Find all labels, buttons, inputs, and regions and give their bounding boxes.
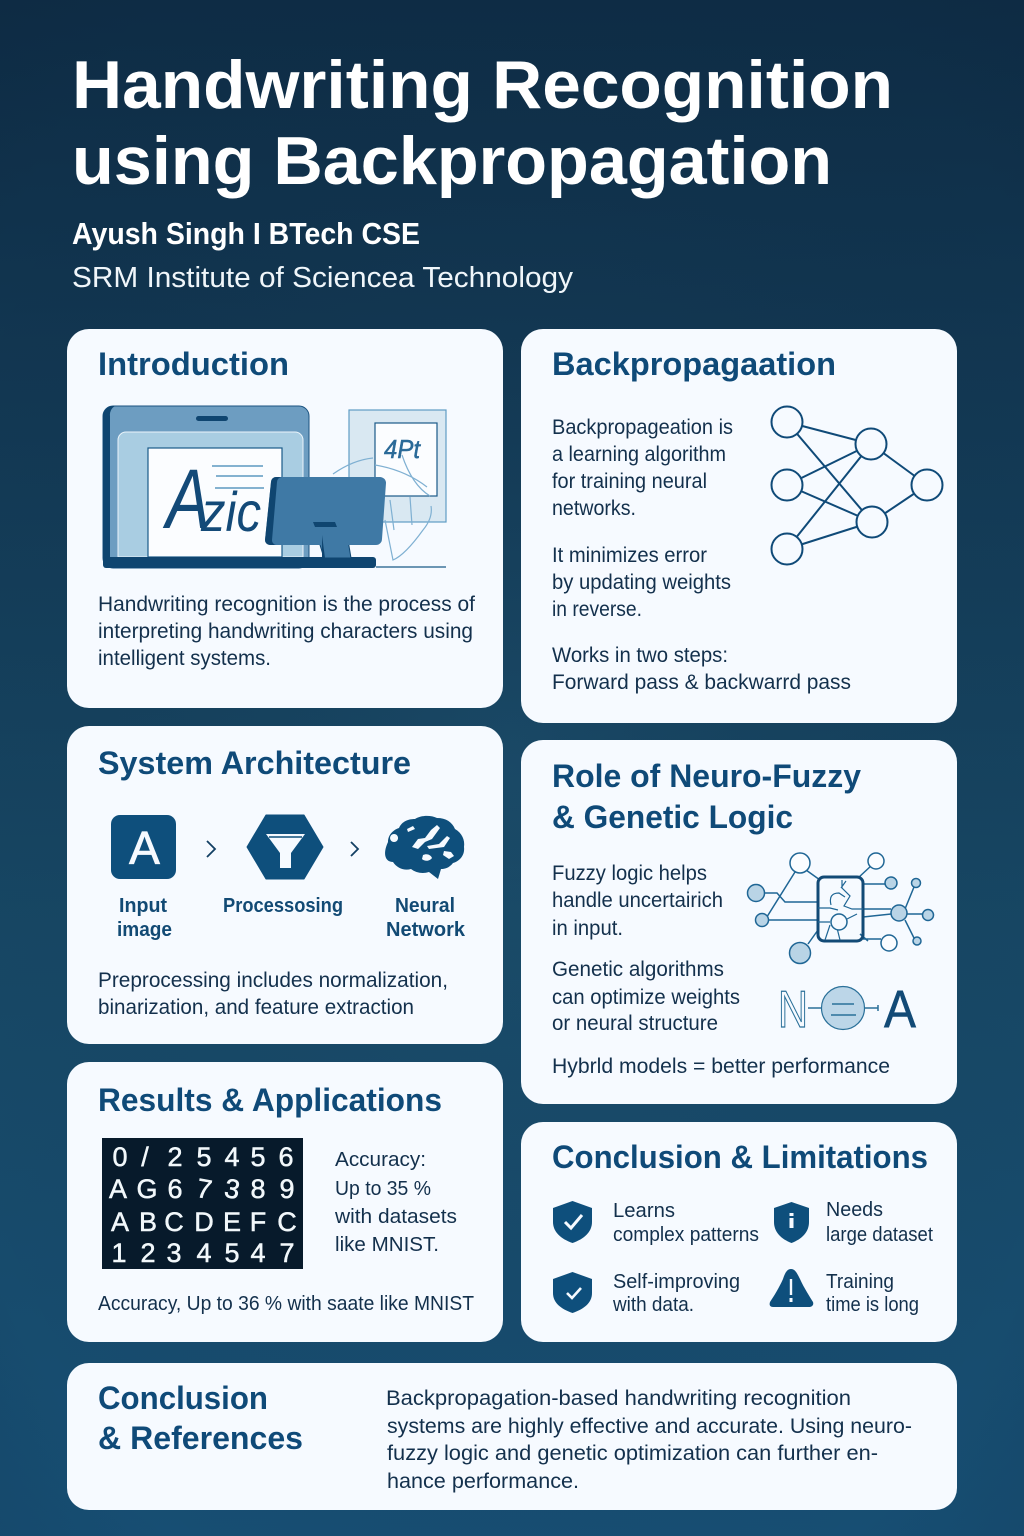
image: handwritten digit samples: 8 bbox=[250, 1174, 266, 1204]
author line: Ayush Singh I BTech CSE bbox=[72, 216, 420, 251]
text: hybrid models: Hybrld models = better performance bbox=[552, 1055, 890, 1078]
image: handwritten digit samples: F bbox=[250, 1207, 266, 1237]
image: handwritten digit samples: 1 bbox=[111, 1238, 127, 1268]
text: introduction body: Handwriting recognition is the process of bbox=[98, 593, 475, 616]
text: backpropagation definition: a learning algorithm bbox=[552, 443, 726, 466]
text: fuzzy logic: handle uncertairich bbox=[552, 889, 723, 912]
image: handwritten digit samples: 3 bbox=[222, 1173, 242, 1205]
heading: conclusion and references bbox=[98, 1380, 303, 1456]
text: conclusion body: systems are highly effective and accurate. Using neuro- bbox=[387, 1415, 912, 1438]
illustration: tablet and monitor with handwriting bbox=[103, 406, 446, 568]
heading: neuro-fuzzy: Role of Neuro-Fuzzy bbox=[552, 758, 861, 794]
text: conclusion body: Backpropagation-based handwriting recognition bbox=[386, 1387, 851, 1410]
icon: N equals A: N bbox=[778, 981, 808, 1039]
image: handwritten digit samples: 5 bbox=[250, 1142, 266, 1172]
label: input image: Input bbox=[119, 895, 167, 917]
image: handwritten digit samples: A bbox=[111, 1207, 129, 1237]
label: processing: Processosing bbox=[223, 895, 343, 917]
image: handwritten digit samples: C bbox=[277, 1207, 297, 1237]
panel: neuro-fuzzy and genetic logic bbox=[521, 740, 957, 1104]
text: genetic algorithms: can optimize weights bbox=[552, 986, 740, 1009]
text: conclusion body: fuzzy logic and genetic optimization can further en- bbox=[387, 1442, 878, 1465]
text: accuracy: Up to 35 % bbox=[335, 1178, 431, 1200]
icon: brain bbox=[385, 816, 464, 879]
text: learns complex patterns: complex patterns bbox=[613, 1224, 759, 1246]
panel: conclusion and limitations bbox=[521, 1122, 957, 1342]
text: preprocessing: Preprocessing includes normalization, bbox=[98, 969, 448, 992]
icon: N equals A bbox=[778, 980, 917, 1039]
text: genetic algorithms: or neural structure bbox=[552, 1012, 718, 1035]
image: handwritten digit samples: 6 bbox=[278, 1142, 294, 1172]
text: needs large dataset: large dataset bbox=[826, 1224, 933, 1246]
title: Handwriting Recognition bbox=[72, 47, 893, 123]
image: handwritten digit samples: / bbox=[141, 1142, 149, 1172]
text: training time: Training bbox=[826, 1271, 894, 1293]
image: handwritten digit samples: 5 bbox=[196, 1142, 212, 1172]
text: error minimisation: in reverse. bbox=[552, 598, 642, 621]
panel: introduction bbox=[67, 329, 503, 708]
text: training time bbox=[826, 1271, 919, 1316]
text: self-improving bbox=[612, 1271, 740, 1316]
text: accuracy: Accuracy: bbox=[335, 1149, 426, 1171]
icon: processing funnel bbox=[247, 815, 323, 879]
text: accuracy: like MNIST. bbox=[335, 1234, 439, 1256]
text: error minimisation: by updating weights bbox=[552, 571, 731, 594]
image: handwritten digit samples: 6 bbox=[167, 1174, 183, 1204]
icon: shield check bbox=[553, 1272, 592, 1313]
panel: system architecture bbox=[67, 726, 503, 1044]
heading: results: Results & Applications bbox=[98, 1082, 442, 1118]
heading: conclusion and references: & References bbox=[98, 1420, 303, 1456]
label: neural network bbox=[386, 895, 466, 941]
text: preprocessing: binarization, and feature extraction bbox=[98, 996, 414, 1019]
text: fuzzy logic: in input. bbox=[552, 917, 623, 940]
image: handwritten digit samples: A bbox=[109, 1174, 127, 1204]
image: handwritten digit samples: 5 bbox=[224, 1238, 240, 1268]
image: handwritten digit samples: 7 bbox=[194, 1173, 214, 1205]
icon: N equals A: A bbox=[884, 980, 917, 1039]
image: handwritten digit samples: E bbox=[223, 1207, 241, 1237]
title bbox=[72, 47, 893, 199]
illustration: tablet and monitor with handwriting: 4Pt bbox=[384, 434, 422, 464]
text: preprocessing bbox=[98, 969, 448, 1019]
image: handwritten digit samples: D bbox=[194, 1207, 214, 1237]
text: two steps: Works in two steps: bbox=[552, 644, 728, 667]
text: learns complex patterns bbox=[613, 1200, 759, 1246]
text: introduction body bbox=[98, 593, 475, 670]
arrow: input to processing bbox=[207, 841, 215, 857]
label: input image bbox=[117, 895, 172, 941]
text: self-improving: with data. bbox=[612, 1294, 694, 1316]
illustration: tablet and monitor with handwriting: zic bbox=[200, 480, 261, 543]
image: handwritten digit samples: B bbox=[139, 1207, 157, 1237]
image: handwritten digit samples: 7 bbox=[279, 1238, 295, 1268]
image: handwritten digit samples: 2 bbox=[167, 1142, 183, 1172]
image: handwritten digit samples: G bbox=[136, 1174, 158, 1204]
text: fuzzy logic: Fuzzy logic helps bbox=[552, 862, 707, 885]
image: handwritten digit samples: 4 bbox=[224, 1142, 240, 1172]
label: input image: image bbox=[117, 919, 172, 941]
text: self-improving: Self-improving bbox=[613, 1271, 740, 1293]
panel: results and applications bbox=[67, 1062, 503, 1342]
title: using Backpropagation bbox=[72, 123, 832, 199]
text: learns complex patterns: Learns bbox=[613, 1200, 675, 1222]
illustration: tablet and monitor with handwriting: A bbox=[162, 452, 210, 546]
heading: conclusion and limitations: Conclusion & Limitations bbox=[552, 1139, 928, 1175]
institution line: SRM Institute of Sciencea Technology bbox=[72, 262, 574, 294]
heading: backpropagation: Backpropagaation bbox=[552, 346, 836, 382]
text: needs large dataset: Needs bbox=[826, 1199, 883, 1221]
image: handwritten digit samples bbox=[102, 1138, 303, 1269]
text: conclusion body: hance performance. bbox=[387, 1470, 579, 1493]
text: accuracy: with datasets bbox=[334, 1206, 457, 1228]
image: handwritten digit samples: 2 bbox=[140, 1238, 156, 1268]
text: backpropagation definition: Backpropageation is bbox=[552, 416, 733, 439]
text: fuzzy logic bbox=[552, 862, 723, 940]
image: handwritten digit samples: C bbox=[164, 1207, 184, 1237]
heading: neuro-fuzzy bbox=[552, 758, 861, 835]
text: backpropagation definition: for training neural bbox=[552, 470, 707, 493]
text: two steps bbox=[552, 644, 851, 694]
image: handwritten digit samples: 4 bbox=[196, 1238, 212, 1268]
heading: neuro-fuzzy: & Genetic Logic bbox=[552, 799, 793, 835]
icon: shield check bbox=[553, 1201, 592, 1243]
icon: input image: A bbox=[129, 822, 160, 874]
text: conclusion body bbox=[386, 1387, 912, 1493]
image: handwritten digit samples: 3 bbox=[166, 1238, 182, 1268]
text: introduction body: interpreting handwriting characters using bbox=[98, 620, 473, 643]
text: genetic algorithms bbox=[552, 958, 740, 1035]
text: accuracy summary: Accuracy, Up to 36 % with saate like MNIST bbox=[98, 1293, 474, 1315]
text: introduction body: intelligent systems. bbox=[98, 647, 271, 670]
icon: input image bbox=[111, 815, 176, 879]
text: error minimisation bbox=[552, 544, 731, 621]
text: error minimisation: It minimizes error bbox=[552, 544, 707, 567]
heading: introduction: Introduction bbox=[98, 346, 289, 382]
image: handwritten digit samples: 0 bbox=[112, 1142, 128, 1172]
text: backpropagation definition: networks. bbox=[552, 497, 636, 520]
label: neural network: Network bbox=[386, 919, 466, 941]
icon: neuro-fuzzy network bbox=[748, 853, 934, 964]
icon: warning triangle bbox=[770, 1269, 813, 1307]
icon: shield info bbox=[774, 1202, 809, 1243]
arrow: processing to network bbox=[351, 842, 358, 856]
text: backpropagation definition bbox=[552, 416, 733, 520]
image: handwritten digit samples: 9 bbox=[279, 1174, 295, 1204]
text: genetic algorithms: Genetic algorithms bbox=[552, 958, 724, 981]
icon: neural network diagram bbox=[772, 406, 942, 564]
heading: system architecture: System Architecture bbox=[98, 745, 411, 781]
panel: conclusion and references bbox=[67, 1363, 957, 1510]
heading: conclusion and references: Conclusion bbox=[98, 1380, 268, 1416]
label: neural network: Neural bbox=[395, 895, 455, 917]
image: handwritten digit samples: 4 bbox=[250, 1238, 266, 1268]
text: two steps: Forward pass & backwarrd pass bbox=[552, 671, 851, 694]
text: accuracy bbox=[334, 1149, 457, 1256]
text: needs large dataset bbox=[826, 1199, 933, 1246]
text: training time: time is long bbox=[826, 1294, 919, 1316]
panel: backpropagation bbox=[521, 329, 957, 723]
